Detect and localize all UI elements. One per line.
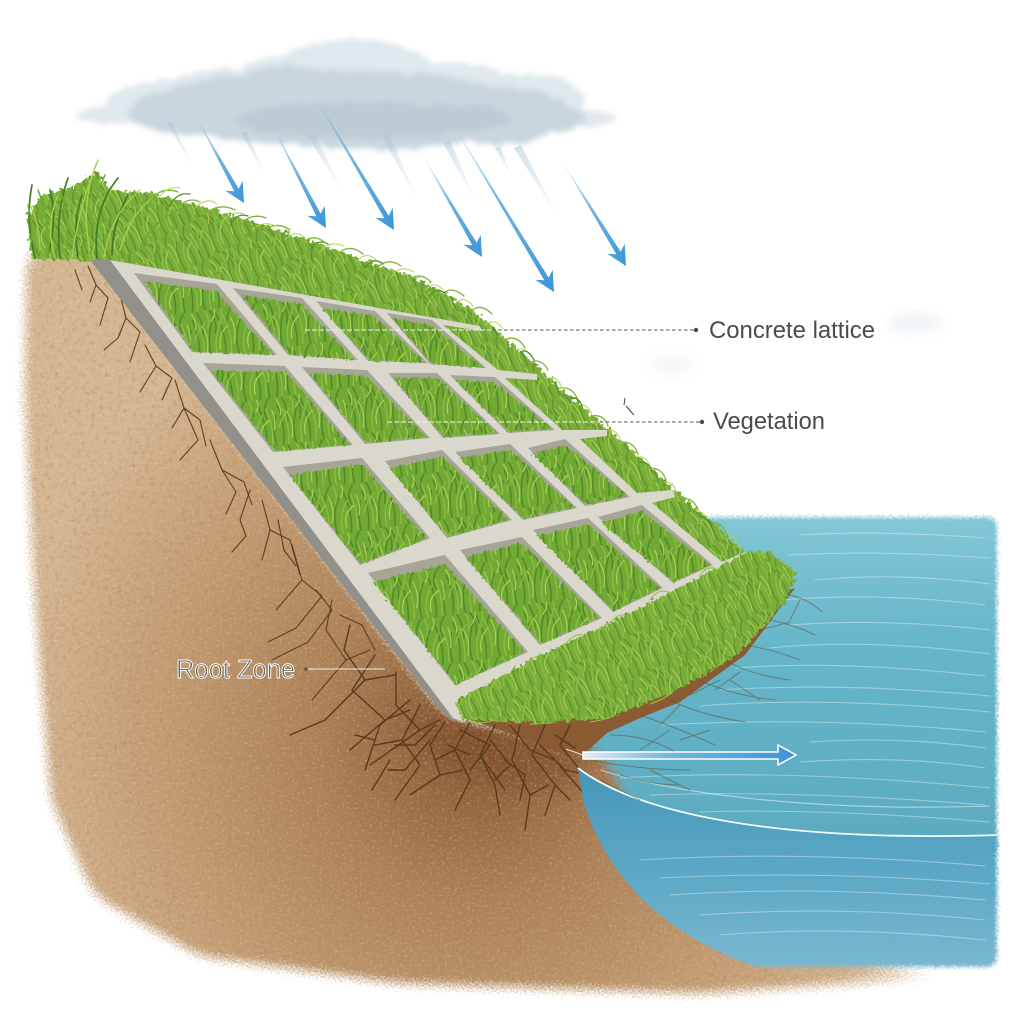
callout: root zone: Root Zone [176,656,295,684]
rain arrow 1 [195,115,244,203]
lattice: sunken cell walls [134,273,713,685]
water: foreground darker wave [578,768,1010,975]
soil: base fill [0,240,1000,1010]
roots fan under grass strip [290,625,590,830]
seepage flow arrow [566,745,796,765]
callout: vegetation: Vegetation [713,409,825,435]
grass band: body [25,171,744,562]
soil: wedge under grass strip [450,588,795,754]
soil: dark speckle [24,259,899,990]
stray mark [624,398,634,415]
soil: light speckle [20,258,884,997]
rain arrow 5 [449,118,554,292]
callout: concrete lattice: Concrete lattice [709,317,875,344]
grass strip: body [454,550,798,725]
grass band: upright blades on left clump [28,160,190,258]
lattice: vegetation in cells [130,270,730,690]
lattice: shaded side face [90,260,460,720]
upper grass band [25,159,744,562]
soil: dark zone beneath grass strip [422,720,586,790]
grass band: fringe blades along crest [150,188,738,545]
water: ripples [620,533,990,940]
callout: vegetation [387,409,825,435]
rain arrow 3 [314,95,394,230]
callout: root zone [176,656,385,684]
rain arrow 6 [560,158,626,266]
roots along slope [75,266,375,700]
cloud [76,40,616,149]
water: white wave crest [578,768,1000,836]
rain arrow 4 [421,153,482,257]
front grass strip [454,550,798,725]
water: calm surface [540,510,1010,850]
rain arrow 2 [271,123,326,228]
water: foreground [578,533,1010,975]
soil body [0,240,1000,1010]
faint rain streaks [167,122,564,227]
grass strip: edge blades [458,552,796,724]
roots reaching into water [590,595,822,800]
distant faint clouds [650,316,943,373]
concrete lattice [90,260,748,722]
callout: concrete lattice [305,317,875,344]
rain arrows [195,95,626,292]
lattice: top face [110,260,748,722]
